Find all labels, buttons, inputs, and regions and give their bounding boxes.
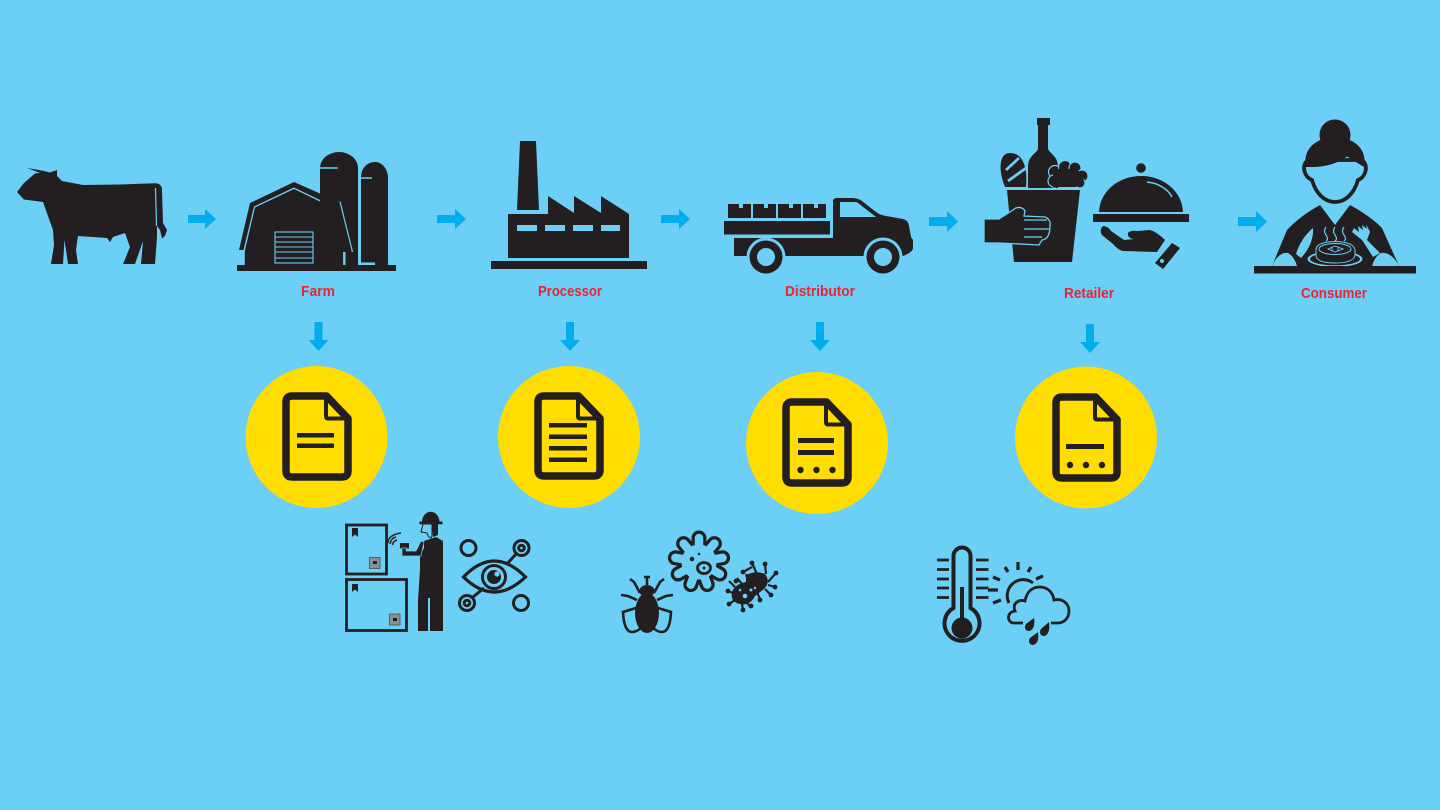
icon: farm document badge: [246, 366, 388, 508]
label: Farm: Farm: [301, 283, 335, 300]
arrow: processor down to document: [560, 322, 580, 351]
icon: farm barn and silos: [237, 152, 396, 271]
icon: worker scanning boxes: [346, 512, 443, 631]
icon: retailer document badge: [1015, 366, 1157, 508]
arrow: farm down to document: [308, 322, 328, 351]
icon: sun, cloud and rain: [988, 562, 1069, 645]
arrow: distributor to retailer: [929, 211, 958, 232]
icon: processor document badge: [498, 366, 640, 508]
icon: surveillance eye network: [460, 540, 529, 610]
label: Consumer: Consumer: [1301, 285, 1367, 302]
icon: consumer eating a steak: [1254, 120, 1416, 274]
icon: retailer grocery bag and serving cloche: [984, 118, 1189, 269]
arrow: retailer to consumer: [1238, 211, 1267, 232]
icon: distributor truck: [724, 198, 913, 276]
arrow: distributor down to document: [810, 322, 830, 351]
arrow: cow to farm: [188, 209, 216, 229]
icon: thermometer: [937, 548, 988, 641]
arrow: retailer down to document: [1080, 324, 1100, 353]
icon: fly: [621, 577, 673, 633]
icon: processor factory: [491, 141, 647, 269]
icon: bacteria: [726, 561, 778, 612]
label: Distributor: Distributor: [785, 283, 855, 300]
label: Retailer: Retailer: [1064, 285, 1114, 302]
label: Processor: Processor: [538, 283, 602, 300]
icon: distributor document badge: [746, 372, 888, 514]
arrow: farm to processor: [437, 209, 466, 229]
icon: virus: [675, 538, 723, 585]
icon: cow: [17, 168, 167, 264]
arrow: processor to distributor: [661, 209, 690, 229]
